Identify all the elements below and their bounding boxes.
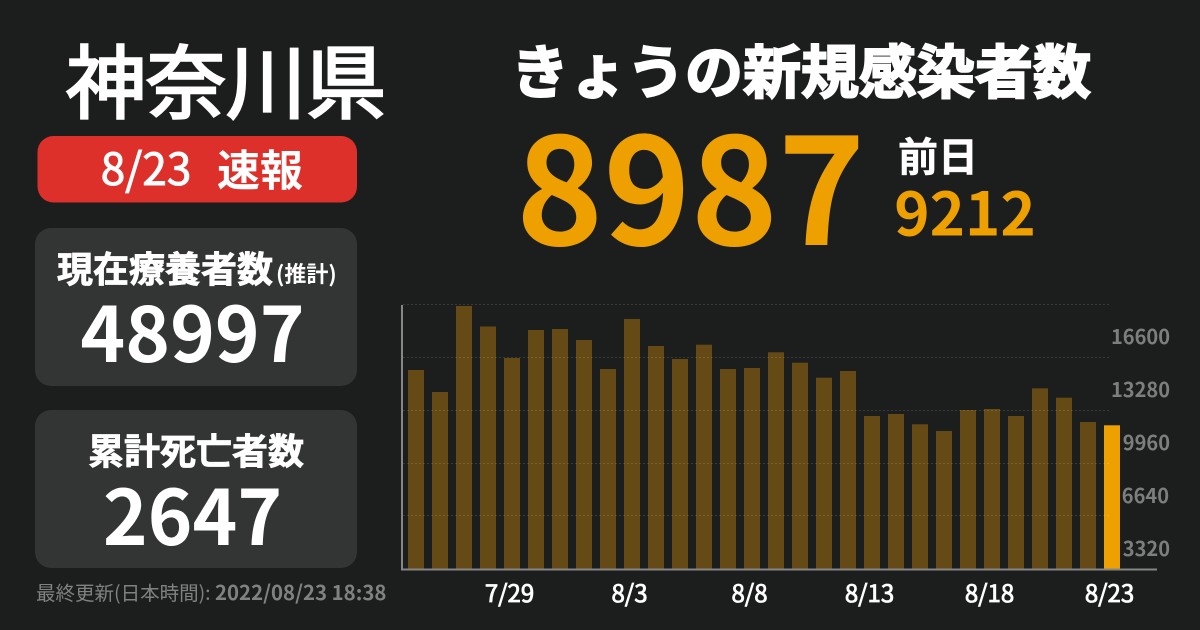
y axis labels: 13280 bbox=[1111, 374, 1170, 403]
big number: today's new cases: 8987 bbox=[516, 73, 865, 288]
x axis labels: 8/3 bbox=[611, 574, 648, 609]
badge: date and breaking news: 8/23 bbox=[101, 134, 191, 198]
heading: today's new cases: きょうの新規感染者数 bbox=[511, 26, 1091, 110]
last updated timestamp: 最終更新(日本時間): bbox=[36, 577, 211, 606]
x axis labels: 7/29 bbox=[485, 574, 534, 609]
x axis labels: 8/8 bbox=[731, 574, 768, 609]
x axis labels: 8/18 bbox=[965, 574, 1014, 609]
panel: cumulative deaths bbox=[35, 410, 357, 568]
label: patients under care: 現在療養者数 bbox=[57, 241, 273, 293]
last updated timestamp: 2022/08/23 18:38 bbox=[215, 576, 386, 606]
title: prefecture name: 神奈川県 bbox=[66, 20, 386, 136]
x axis labels: 8/13 bbox=[845, 574, 894, 609]
bar chart: daily new cases bbox=[401, 304, 1157, 570]
badge: date and breaking news: 速報 bbox=[217, 137, 303, 199]
y axis labels: 9960 bbox=[1123, 427, 1170, 456]
y axis labels bbox=[1111, 321, 1170, 562]
value: previous day: 9212 bbox=[894, 166, 1036, 254]
x axis labels bbox=[485, 574, 1134, 609]
y axis labels: 6640 bbox=[1122, 480, 1169, 509]
note: estimated: (推計) bbox=[276, 257, 337, 289]
y axis labels: 3320 bbox=[1123, 533, 1170, 562]
y axis labels: 16600 bbox=[1111, 321, 1170, 350]
badge: date and breaking news bbox=[38, 134, 357, 202]
panel: current patients under care bbox=[35, 228, 357, 386]
label: previous day: 前日 bbox=[898, 125, 978, 183]
highlighted bar: 8/23 bbox=[1104, 425, 1120, 568]
value: cumulative deaths: 2647 bbox=[103, 457, 282, 567]
value: patients under care: 48997 bbox=[80, 274, 305, 384]
x axis labels: 8/23 bbox=[1085, 574, 1134, 609]
label: cumulative deaths: 累計死亡者数 bbox=[88, 423, 304, 475]
